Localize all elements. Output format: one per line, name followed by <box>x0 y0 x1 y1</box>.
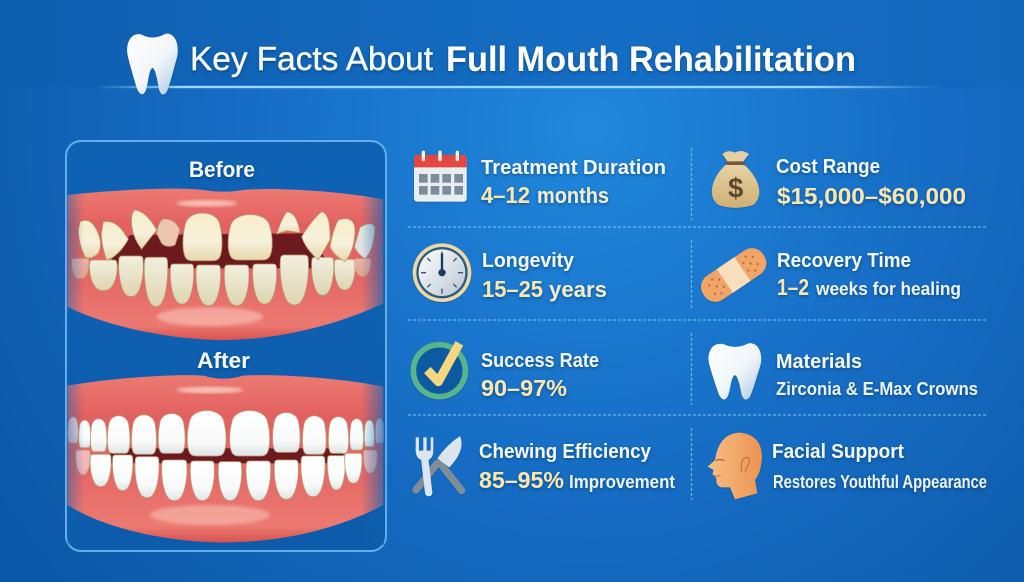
value <box>777 274 961 300</box>
label: Recovery Time <box>777 250 911 272</box>
fact: success rate <box>413 343 599 401</box>
fact: longevity <box>413 243 607 302</box>
value: Improvement <box>569 472 675 492</box>
panel: before and after <box>66 141 386 551</box>
value: $15,000–$60,000 <box>777 183 966 209</box>
illustration: teeth after <box>67 375 384 545</box>
value: 1–2 <box>777 274 809 300</box>
title text <box>190 40 856 79</box>
label: Facial Support <box>772 441 904 463</box>
value <box>479 467 675 493</box>
icon: money bag: $ <box>728 172 743 203</box>
icon: fork and knife <box>416 436 462 493</box>
icon: check mark <box>413 343 465 397</box>
value: 15–25 <box>482 276 543 302</box>
fact: recovery time <box>696 243 961 307</box>
fact: facial support <box>708 433 987 499</box>
label: Success Rate <box>481 350 599 372</box>
value: Zirconia & E-Max Crowns <box>776 379 978 399</box>
fact: materials <box>708 343 978 400</box>
value: 90–97% <box>481 375 567 401</box>
label: Cost Range <box>776 156 880 178</box>
fact: chewing efficiency <box>416 436 675 493</box>
illustration: teeth before <box>67 189 384 343</box>
title text: Full Mouth Rehabilitation <box>446 40 856 79</box>
title rule <box>95 86 940 88</box>
icon: bandage <box>696 243 772 307</box>
heading: before: Before <box>189 157 255 182</box>
icon: tooth in title <box>127 34 178 95</box>
value: 85–95% <box>479 467 564 493</box>
title banner <box>95 34 940 95</box>
fact: cost range <box>712 151 966 209</box>
value <box>481 182 609 208</box>
value: weeks for healing <box>815 279 961 299</box>
value <box>482 276 607 302</box>
icon: tooth <box>708 343 761 400</box>
heading: after: After <box>197 348 250 373</box>
label: Chewing Efficiency <box>479 441 652 463</box>
value: 4–12 <box>481 182 530 208</box>
title text: Key Facts About <box>190 40 433 77</box>
value: months <box>537 183 609 208</box>
fact: treatment duration <box>414 151 666 208</box>
label: Treatment Duration <box>481 157 666 179</box>
icon: calendar <box>414 151 467 202</box>
value: years <box>549 277 607 302</box>
icon: clock <box>413 243 471 302</box>
dividers <box>408 148 988 500</box>
icon: head profile <box>708 433 762 499</box>
label: Materials <box>776 351 862 373</box>
icon: money bag <box>712 151 759 208</box>
label: Longevity <box>482 250 575 272</box>
